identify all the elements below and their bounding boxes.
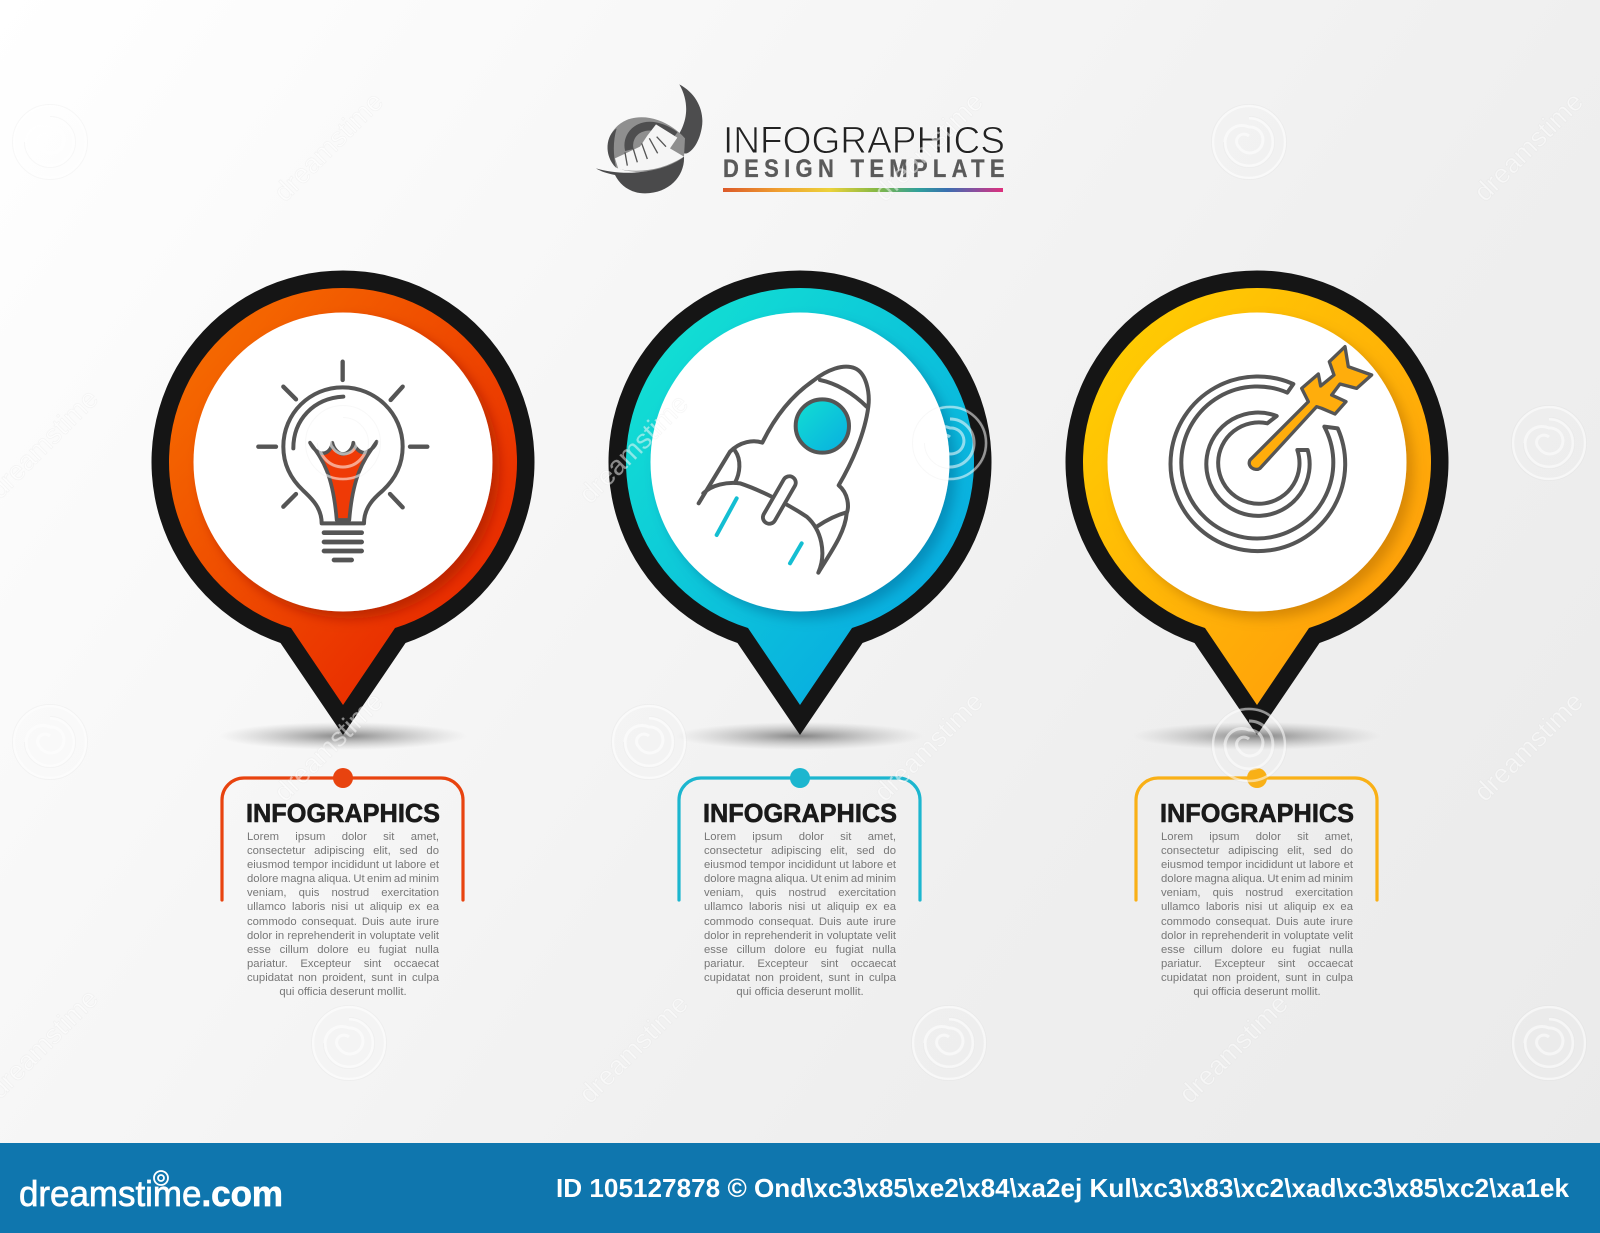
body text: red box: Lorem ipsum dolor sit amet,: [247, 831, 439, 843]
text: dreamstime: [1173, 988, 1294, 1109]
body text: teal box: cupidatat non proident, sunt in culpa: [704, 972, 896, 984]
text: dreamstime: [268, 86, 389, 207]
body text: teal box: commodo consequat. Duis aute irure: [704, 916, 896, 928]
body text: amber box: dolore magna aliqua. Ut enim ad minim: [1161, 873, 1353, 885]
body text: amber box: ullamco laboris nisi ut aliquip ex ea: [1161, 901, 1353, 913]
body text: teal box: [704, 831, 896, 998]
body text: amber box: [1161, 831, 1353, 998]
panel: amber text box: INFOGRAPHICS: [1160, 798, 1354, 828]
text: dreamstime: [573, 388, 694, 509]
body text: amber box: consectetur adipiscing elit, sed do: [1161, 845, 1353, 857]
body text: amber box: commodo consequat. Duis aute irure: [1161, 916, 1353, 928]
body text: amber box: eiusmod tempor incididunt ut labore et: [1161, 859, 1353, 871]
body text: teal box: consectetur adipiscing elit, sed do: [704, 845, 896, 857]
icon: target with arrow: [1171, 347, 1372, 551]
body text: red box: qui officia deserunt mollit.: [279, 986, 407, 998]
text: dreamstime: [268, 686, 389, 807]
body text: amber box: pariatur. Excepteur sint occaecat: [1161, 958, 1353, 970]
text: dreamstime: [1468, 686, 1589, 807]
footer banner: [0, 1143, 1600, 1233]
body text: amber box: esse cillum dolore eu fugiat nulla: [1161, 944, 1353, 956]
body text: red box: [247, 831, 439, 998]
body text: amber box: dolor in reprehenderit in voluptate velit: [1161, 930, 1353, 942]
body text: teal box: ullamco laboris nisi ut aliquip ex ea: [704, 901, 896, 913]
body text: teal box: esse cillum dolore eu fugiat nulla: [704, 944, 896, 956]
panel: amber text box: [1134, 768, 1379, 998]
body text: amber box: Lorem ipsum dolor sit amet,: [1161, 831, 1353, 843]
footer credit text: ID 105127878 © Ond\xc3\x85\xe2\x84\xa2ej Kul\xc3\x83\xc2\xad\xc3\x85\xc2\xa1ek: [556, 1173, 1570, 1203]
footer logo: dreamstime.com: dreamstime.com: [19, 1173, 283, 1214]
body text: red box: cupidatat non proident, sunt in culpa: [247, 972, 439, 984]
subtitle: DESIGN TEMPLATE: DESIGN TEMPLATE: [723, 155, 1005, 182]
icon: light bulb: [258, 362, 427, 560]
text: dreamstime: [868, 686, 989, 807]
title: INFOGRAPHICS: INFOGRAPHICS: [723, 120, 1005, 162]
text: dreamstime: [868, 86, 989, 207]
body text: red box: veniam, quis nostrud exercitation: [247, 887, 439, 899]
body text: amber box: veniam, quis nostrud exercitation: [1161, 887, 1353, 899]
pin: amber with target: [1066, 270, 1448, 750]
panel: red text box: INFOGRAPHICS: [246, 798, 440, 828]
panel: teal text box: [677, 768, 922, 998]
body text: teal box: qui officia deserunt mollit.: [736, 986, 864, 998]
body text: red box: ullamco laboris nisi ut aliquip ex ea: [247, 901, 439, 913]
icon: spiral above the i: [154, 1171, 168, 1185]
icon: rocket: [699, 367, 869, 573]
icon: grey swoosh logo: [596, 84, 702, 193]
body text: teal box: pariatur. Excepteur sint occaecat: [704, 958, 896, 970]
body text: teal box: dolore magna aliqua. Ut enim ad minim: [704, 873, 896, 885]
body text: teal box: Lorem ipsum dolor sit amet,: [704, 831, 896, 843]
panel: teal text box: INFOGRAPHICS: [703, 798, 897, 828]
body text: teal box: eiusmod tempor incididunt ut labore et: [704, 859, 896, 871]
body text: red box: commodo consequat. Duis aute irure: [247, 916, 439, 928]
pin: red with light bulb: [152, 270, 535, 750]
body text: red box: dolore magna aliqua. Ut enim ad minim: [247, 873, 439, 885]
panel: red text box: [220, 768, 465, 998]
header logo and title: [596, 84, 1005, 193]
text: dreamstime: [573, 988, 694, 1109]
body text: teal box: dolor in reprehenderit in voluptate velit: [704, 930, 896, 942]
body text: red box: consectetur adipiscing elit, sed do: [247, 845, 439, 857]
body text: red box: dolor in reprehenderit in voluptate velit: [247, 930, 439, 942]
pin: teal with rocket: [608, 270, 992, 750]
body text: amber box: cupidatat non proident, sunt in culpa: [1161, 972, 1353, 984]
body text: red box: esse cillum dolore eu fugiat nulla: [247, 944, 439, 956]
rainbow underline: [723, 188, 1003, 192]
body text: red box: eiusmod tempor incididunt ut labore et: [247, 859, 439, 871]
body text: amber box: qui officia deserunt mollit.: [1193, 986, 1321, 998]
body text: red box: pariatur. Excepteur sint occaecat: [247, 958, 439, 970]
body text: teal box: veniam, quis nostrud exercitation: [704, 887, 896, 899]
text: dreamstime: [1468, 86, 1589, 207]
